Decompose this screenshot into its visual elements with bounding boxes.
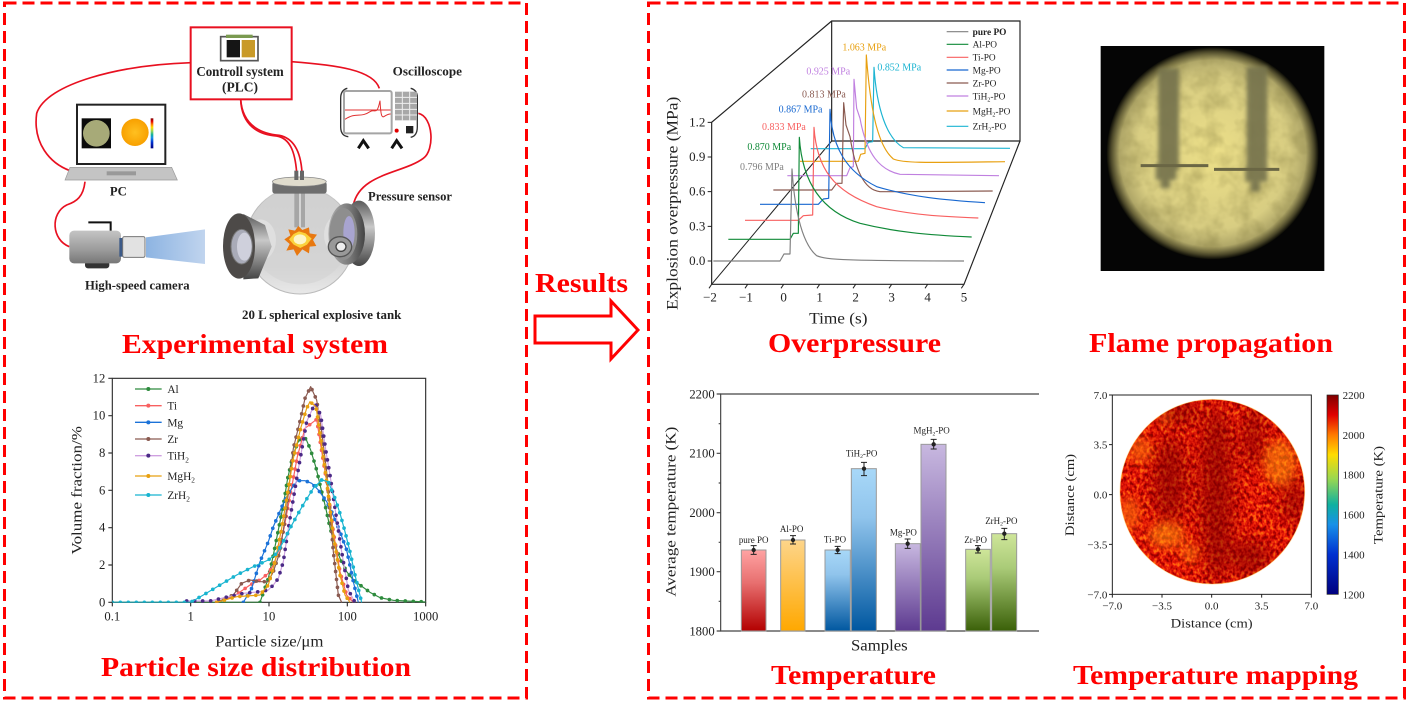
tick labels: 3.5 — [1255, 600, 1269, 612]
legend: ZrH — [973, 123, 988, 133]
feed tube — [294, 193, 305, 227]
colour bar: Temperature (K) — [1371, 446, 1385, 544]
tick labels: 2 — [99, 558, 105, 572]
icon: spherical explosive tank: 20 L spherical explosive tank — [242, 308, 402, 322]
tick labels — [689, 387, 715, 638]
chart: particle size distribution — [69, 371, 438, 651]
legend: -PO — [995, 107, 1011, 117]
icon: spherical explosive tank — [223, 171, 452, 322]
legend: Al-PO — [973, 41, 997, 51]
peak value labels: 0.833 MPa — [762, 122, 806, 133]
tick labels: 0.0 — [1205, 600, 1219, 612]
tick labels: 10 — [263, 609, 275, 623]
lid — [272, 182, 327, 194]
tick labels: 7.0 — [1304, 600, 1319, 612]
control system box — [191, 27, 292, 99]
legend: Ti-PO — [973, 54, 996, 64]
axis titles: Explosion overpressure (MPa) — [664, 97, 681, 310]
legend: pure PO — [973, 28, 1006, 38]
tick labels — [93, 371, 438, 623]
heading: particle size distribution: Particle size distribution — [101, 652, 411, 682]
legend: Zr-PO — [973, 79, 997, 89]
heading: overpressure: Overpressure — [768, 328, 941, 358]
axis titles: Distance (cm) — [1063, 454, 1077, 536]
tick labels: 1 — [816, 290, 823, 305]
legend: 2 — [191, 476, 195, 485]
tick labels: 1000 — [413, 609, 438, 623]
bar labels: 2 — [932, 431, 935, 437]
colour bar: 1400 — [1343, 549, 1365, 561]
legend: 2 — [185, 455, 189, 464]
peak value labels — [740, 42, 922, 173]
chart: explosion overpressure: Time (s) — [809, 311, 867, 328]
panel: right dashed frame — [648, 3, 1404, 698]
heading: temperature: Temperature — [771, 660, 936, 690]
axes and ticks — [717, 394, 1039, 631]
tick labels: 1800 — [689, 624, 715, 638]
syringe shadows — [1156, 67, 1267, 192]
legend: Mg-PO — [973, 66, 1001, 76]
legend: Al — [167, 384, 179, 396]
chart: temperature mapping: Distance (cm) — [1171, 617, 1253, 631]
ticks — [708, 122, 964, 288]
icon: high-speed camera — [69, 222, 205, 292]
tick labels: 2000 — [689, 506, 715, 520]
tick labels: 0.0 — [1094, 490, 1108, 502]
peak value labels: 0.852 MPa — [877, 63, 922, 74]
bar labels — [739, 426, 1018, 545]
colour bar — [1327, 390, 1385, 601]
error bars — [751, 439, 1007, 554]
tick labels: 0.0 — [689, 253, 705, 268]
chart: temperature mapping — [1063, 390, 1385, 631]
bar labels: -PO — [935, 426, 950, 436]
peak value labels: 0.813 MPa — [802, 89, 846, 100]
connecting wires — [36, 62, 431, 247]
bar labels: -PO — [1003, 516, 1018, 526]
bar labels: 2 — [860, 454, 863, 460]
legend: 2 — [992, 112, 995, 118]
tick labels: 3.5 — [1094, 440, 1108, 452]
legend — [947, 28, 1011, 134]
tick labels: 2100 — [689, 447, 715, 461]
tick labels: 0.9 — [689, 149, 705, 164]
bar labels: ZrH — [985, 516, 1000, 526]
chart: particle size distribution: Particle size/μm — [215, 634, 323, 651]
legend: -PO — [990, 92, 1006, 102]
arrow: results — [535, 301, 638, 359]
chart: average temperature bars: Samples — [851, 637, 908, 654]
image: flame propagation — [1101, 46, 1324, 271]
bar labels: Zr-PO — [964, 535, 988, 545]
panel: experimental system diagram — [36, 27, 462, 322]
icon: spherical explosive tank: Pressure sensor — [368, 189, 452, 203]
axis titles: Average temperature (K) — [664, 427, 680, 597]
tick labels: 6 — [99, 483, 105, 497]
legend: Ti — [167, 401, 177, 413]
legend: TiH — [973, 92, 987, 102]
tick labels: 0.6 — [689, 184, 706, 199]
tick labels: 0 — [780, 290, 787, 305]
icon: oscilloscope — [341, 64, 462, 148]
colour bar: 1600 — [1343, 510, 1365, 522]
tick labels: 2 — [852, 290, 859, 305]
tick labels: 100 — [338, 609, 357, 623]
peak value labels: 0.867 MPa — [779, 104, 823, 115]
tick labels: 5 — [961, 290, 967, 305]
tick labels: −2 — [703, 290, 717, 305]
colour bar: 1200 — [1343, 589, 1365, 601]
tick labels: 7.0 — [1094, 390, 1108, 402]
axes and ticks — [1109, 395, 1311, 598]
peak value labels: 0.796 MPa — [740, 162, 784, 173]
bar labels: Al-PO — [780, 524, 804, 534]
legend: TiH — [167, 451, 185, 463]
legend: ZrH — [167, 490, 186, 502]
legend: 2 — [186, 495, 190, 504]
bars — [741, 444, 1017, 631]
heading: temperature mapping: Temperature mapping — [1073, 660, 1359, 690]
bar labels: 2 — [1000, 522, 1003, 528]
axes and ticks — [108, 378, 426, 606]
distribution curves — [112, 387, 426, 602]
legend: -PO — [991, 123, 1007, 133]
tick labels: 0.1 — [104, 609, 120, 623]
tick labels: 3 — [888, 290, 895, 305]
right port — [343, 201, 375, 266]
legend: MgH — [973, 107, 992, 117]
chart: explosion overpressure — [664, 21, 1020, 328]
legend: MgH — [167, 471, 191, 483]
chart: average temperature bars — [664, 387, 1039, 654]
bar labels: TiH — [846, 448, 860, 458]
bar labels: Mg-PO — [890, 527, 917, 537]
tick labels: 1900 — [689, 565, 715, 579]
tick labels — [1087, 390, 1319, 612]
tick labels: 1.2 — [689, 114, 705, 129]
tick labels: 1 — [188, 609, 194, 623]
heat map disc — [1120, 399, 1305, 584]
colour bar: 2000 — [1343, 430, 1365, 442]
tick labels: 0.3 — [689, 218, 705, 233]
bar labels: Ti-PO — [824, 535, 847, 545]
tick labels: 4 — [99, 521, 106, 535]
colour bar: 1800 — [1343, 470, 1365, 482]
tick labels: 8 — [99, 446, 105, 460]
legend: Mg — [167, 417, 183, 429]
tick labels: 4 — [924, 290, 931, 305]
icon: oscilloscope: Oscilloscope — [393, 64, 462, 78]
icon: laptop PC: PC — [110, 184, 127, 198]
colour bar: 2200 — [1343, 390, 1365, 402]
heading: experimental system: Experimental system — [122, 329, 389, 359]
tick labels: −7.0 — [1102, 600, 1123, 612]
bar labels: MgH — [914, 426, 932, 436]
heading: flame propagation: Flame propagation — [1089, 328, 1333, 358]
results label: Results — [535, 268, 628, 298]
bar labels: -PO — [863, 448, 878, 458]
tick labels: 10 — [93, 409, 105, 423]
legend — [135, 384, 195, 504]
legend: Zr — [167, 434, 178, 446]
control system box: (PLC) — [222, 80, 258, 95]
tick labels: 12 — [93, 371, 105, 385]
legend: 2 — [987, 97, 990, 103]
peak value labels: 0.870 MPa — [747, 142, 792, 153]
axis titles: Volume fraction/% — [69, 426, 85, 554]
icon: laptop PC — [65, 105, 177, 198]
legend: 2 — [988, 128, 991, 134]
tick labels: −7.0 — [1087, 589, 1108, 601]
tick labels: −3.5 — [1152, 600, 1172, 612]
tick labels: 0 — [99, 595, 105, 609]
control system box: Controll system — [196, 64, 284, 79]
peak value labels: 1.063 MPa — [842, 42, 887, 53]
tick labels — [689, 114, 967, 305]
tick labels: −3.5 — [1087, 539, 1108, 551]
explosion — [284, 226, 317, 256]
tick labels: −1 — [739, 290, 753, 305]
peak value labels: 0.925 MPa — [806, 66, 851, 77]
tick labels: 2200 — [689, 387, 715, 401]
bar labels: pure PO — [739, 535, 769, 545]
panel: left dashed frame — [4, 3, 526, 698]
left port — [243, 214, 272, 279]
icon: high-speed camera: High-speed camera — [85, 278, 190, 292]
3D frame — [712, 21, 1020, 284]
pressure curves — [713, 55, 1010, 261]
